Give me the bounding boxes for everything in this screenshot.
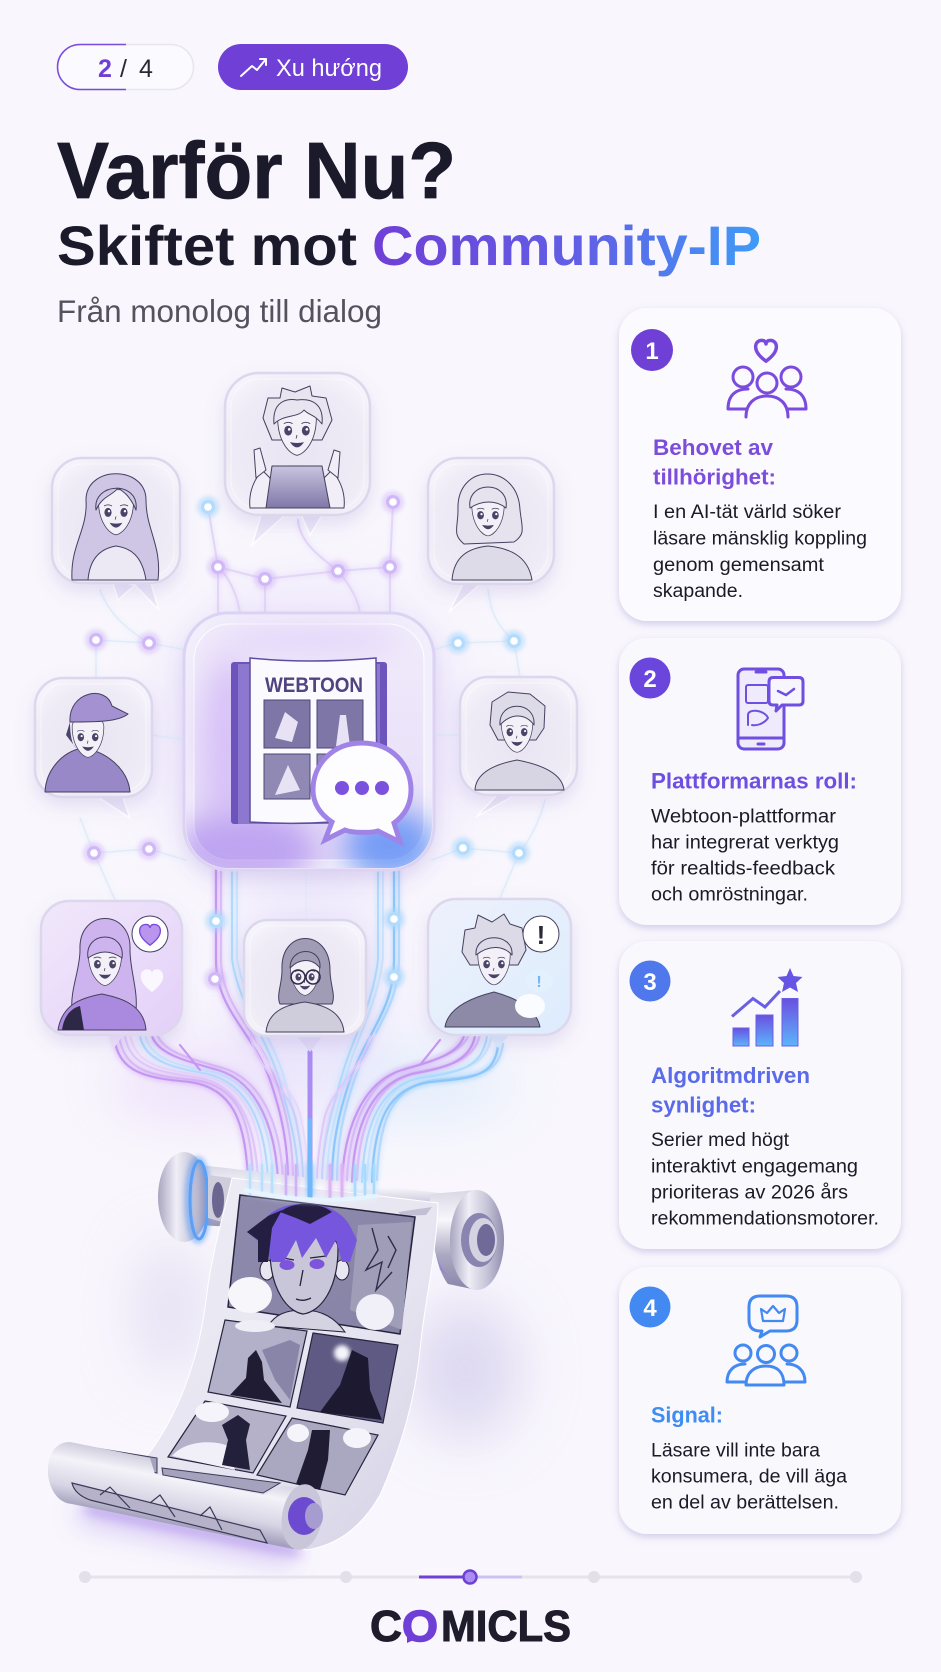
- badge 4: [630, 1286, 670, 1328]
- glass tile: reader with long hair: [52, 458, 180, 610]
- subtitle: Community-IP: [372, 214, 761, 277]
- logo: COMICLS: MICLS: [441, 1602, 571, 1651]
- network nodes: [83, 491, 530, 990]
- heading: Behovet av: [653, 435, 774, 460]
- icon: crown bubble and group: [727, 1296, 805, 1385]
- heading: Plattformarnas roll:: [651, 768, 857, 794]
- center panel glow: [186, 620, 432, 868]
- logo: COMICLS: [370, 1602, 571, 1651]
- comic panel: lower right: [257, 1418, 378, 1495]
- scroll sheet: [100, 1178, 438, 1550]
- logo: COMICLS: C: [370, 1602, 402, 1651]
- card 3: [619, 941, 901, 1249]
- badge 1: 1: [645, 338, 659, 365]
- comic panel: figure: [208, 1320, 307, 1407]
- body text: [651, 806, 839, 906]
- body text: genom gemensamt: [653, 555, 825, 576]
- body text: för realtids-feedback: [651, 858, 836, 880]
- lower wire bundle: [114, 867, 503, 1186]
- tag pill: Xu hướng: Xu hướng: [276, 55, 382, 82]
- progress pill: 2 / 4: [58, 44, 194, 90]
- card 4: [619, 1267, 901, 1534]
- glass tile: excited reader: [428, 899, 571, 1048]
- glass tile: reader with bob: [428, 458, 554, 612]
- heading: tillhörighet:: [653, 464, 776, 490]
- body text: konsumera, de vill äga: [651, 1466, 847, 1488]
- icon: community heart: [728, 340, 806, 417]
- pagination timeline: [79, 1570, 862, 1584]
- book: [231, 658, 387, 824]
- heading: synlighet:: [651, 1092, 756, 1118]
- tagline: Från monolog till dialog: [57, 293, 382, 329]
- icon: phone with chat: [738, 669, 803, 749]
- progress pill: 2 / 4: /: [120, 55, 127, 83]
- badge 2: 2: [643, 666, 657, 693]
- badge 3: 3: [643, 969, 657, 996]
- heading: [653, 435, 776, 490]
- glass tile: excited reader: !: [536, 974, 542, 991]
- icon: rising chart with star: [732, 968, 802, 1046]
- body text: Läsare vill inte bara: [651, 1440, 820, 1462]
- heading: [651, 1063, 810, 1118]
- subtitle: [57, 214, 761, 277]
- body text: en del av berättelsen.: [651, 1492, 839, 1514]
- body text: rekommendationsmotorer.: [651, 1208, 879, 1230]
- comic panel: lower left: [168, 1401, 286, 1473]
- badge 1: [631, 329, 673, 371]
- heading: Signal:: [651, 1402, 723, 1428]
- book: WEBTOON: [265, 674, 363, 697]
- tag pill: Xu hướng: [218, 44, 408, 90]
- body text: interaktivt engagemang: [651, 1156, 858, 1178]
- webtoon scroll: [48, 1152, 504, 1556]
- scroll shadow: [78, 1508, 300, 1556]
- heading: Algoritmdriven: [651, 1063, 810, 1088]
- top roller: [158, 1152, 440, 1242]
- body text: har integrerat verktyg: [651, 832, 839, 854]
- progress pill: 2 / 4: 2: [98, 55, 112, 83]
- subtitle: Skiftet mot: [57, 214, 357, 277]
- body text: I en AI-tät värld söker: [653, 502, 842, 523]
- body text: och omröstningar.: [651, 884, 808, 906]
- chat bubble: [313, 743, 411, 842]
- body text: prioriteras av 2026 års: [651, 1182, 848, 1204]
- progress pill: 2 / 4: 4: [139, 55, 153, 83]
- card 1: [619, 308, 901, 621]
- body text: [653, 502, 867, 602]
- right roller cap: [430, 1190, 504, 1290]
- glass tile: top reader: [225, 373, 370, 545]
- card 2: [619, 638, 901, 925]
- body text: Serier med högt: [651, 1130, 790, 1151]
- wires entering scroll: [246, 1165, 376, 1200]
- bottom roller: [48, 1442, 326, 1552]
- logo: COMICLS: O: [402, 1602, 438, 1651]
- glass tile: reader with cap: [35, 678, 152, 818]
- body text: Webtoon-plattformar: [651, 806, 837, 828]
- body text: läsare mänsklig koppling: [653, 528, 867, 550]
- badge 2: [630, 658, 670, 698]
- body text: skapande.: [653, 581, 743, 602]
- comic panel: night scene: [297, 1333, 398, 1423]
- glass tile: calm reader: [460, 677, 577, 817]
- glass tile: excited reader: !: [537, 920, 545, 950]
- illustration: community network: [35, 373, 577, 1556]
- center panel: webtoon book and chat bubble: [175, 613, 435, 890]
- glass tile: reader with glasses: [244, 920, 366, 1052]
- comic panel: hero portrait: [228, 1195, 415, 1334]
- body text: [651, 1130, 879, 1230]
- title: Varför Nu?: [57, 126, 456, 215]
- badge 3: [630, 960, 670, 1002]
- body text: [651, 1440, 847, 1514]
- glass tile: reader with hearts: [41, 901, 182, 1048]
- soft glows: [105, 580, 520, 1440]
- badge 4: 4: [643, 1295, 657, 1322]
- upper network wires: [80, 502, 545, 900]
